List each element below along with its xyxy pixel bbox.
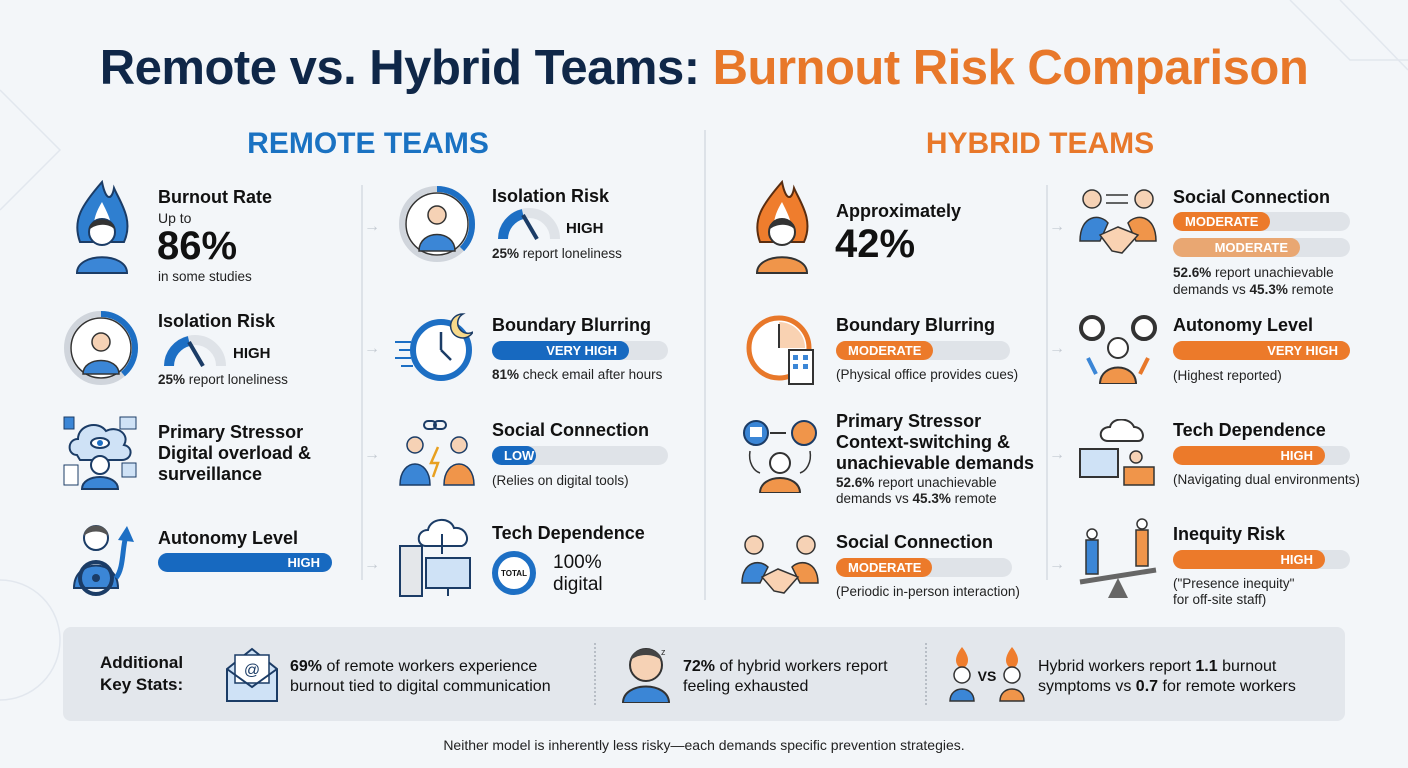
- text: →: [1049, 340, 1065, 357]
- panel: remote isolation risk: Isolation Risk: [158, 311, 275, 331]
- panel: remote isolation risk: HIGH: [233, 345, 270, 362]
- heading: hybrid teams: HYBRID TEAMS: [926, 127, 1154, 160]
- icon: handshake: [741, 535, 819, 594]
- panel: hybrid social connection 2: [1079, 187, 1350, 297]
- label: additional key stats: Additional: [100, 653, 183, 672]
- panel: hybrid autonomy level: (Highest reported): [1173, 368, 1282, 383]
- panel: hybrid autonomy level: VERY HIGH: [1267, 343, 1338, 358]
- panel: remote boundary blurring: [395, 313, 668, 382]
- arrows: [364, 218, 1065, 573]
- footer note: Neither model is inherently less risky—each demands specific prevention strategies.: [443, 737, 965, 753]
- panel: hybrid social connection 2: 52.6% report unachievable: [1173, 265, 1334, 280]
- stat: symptoms: Hybrid workers report 1.1 burnout: [1038, 658, 1276, 675]
- panel: remote boundary blurring: Boundary Blurring: [492, 315, 651, 335]
- icon: digital overload: [64, 416, 136, 490]
- panel: hybrid boundary blurring: Boundary Blurring: [836, 315, 995, 335]
- text: →: [364, 340, 380, 357]
- text: →: [1049, 556, 1065, 573]
- panel: hybrid social connection: Social Connection: [836, 532, 993, 552]
- icon: two people linked: [399, 420, 475, 486]
- panel: hybrid primary stressor: [743, 411, 1034, 506]
- panel: hybrid primary stressor: 52.6% report unachievable: [836, 475, 997, 490]
- panel: hybrid tech dependence: (Navigating dual environments): [1173, 472, 1360, 487]
- panel: hybrid inequity risk: for off-site staff): [1173, 592, 1266, 607]
- icon: envelope: [226, 648, 278, 702]
- text: →: [364, 446, 380, 463]
- panel: remote primary stressor: Digital overload &: [158, 443, 311, 463]
- panel: hybrid social connection 2: Social Connection: [1173, 187, 1330, 207]
- panel: remote isolation risk: [64, 311, 288, 387]
- panel: remote isolation risk 2: 25% report loneliness: [492, 246, 622, 261]
- panel: hybrid primary stressor: unachievable demands: [836, 453, 1034, 473]
- text: →: [1049, 218, 1065, 235]
- panel: additional key stats: [63, 627, 1345, 721]
- panel: hybrid inequity risk: Inequity Risk: [1173, 524, 1285, 544]
- panel: hybrid autonomy level: Autonomy Level: [1173, 315, 1313, 335]
- stat: remote digital: 69% of remote workers experience: [290, 658, 537, 675]
- icon: flame person: [76, 180, 128, 274]
- icon: handshake with arrows: [1079, 189, 1157, 254]
- icon: total ring: TOTAL: [501, 569, 527, 578]
- stat: hybrid exhausted: 72% of hybrid workers report: [683, 658, 888, 675]
- panel: remote boundary blurring: 81% check email after hours: [492, 367, 662, 382]
- panel: remote burnout rate: Burnout Rate: [158, 187, 272, 207]
- panel: remote tech dependence: [399, 518, 645, 597]
- panel: remote social connection: Social Connection: [492, 420, 649, 440]
- icon: computer and cloud: [1079, 419, 1155, 486]
- panel: hybrid social connection: [741, 532, 1020, 599]
- panel: remote autonomy level: HIGH: [288, 555, 320, 570]
- icon: vs flames: VS: [978, 668, 996, 684]
- icon: two steering wheels: [1079, 315, 1157, 384]
- panel: remote burnout rate: 86%: [157, 224, 237, 268]
- panel: remote primary stressor: [64, 416, 311, 490]
- panel: remote isolation risk 2: Isolation Risk: [492, 186, 609, 206]
- label: additional key stats: [100, 653, 183, 694]
- label: additional key stats: Key Stats:: [100, 675, 183, 694]
- panel: hybrid primary stressor: Context-switching &: [836, 432, 1010, 452]
- panel: remote burnout rate: [76, 180, 272, 284]
- panel: remote burnout rate: in some studies: [158, 269, 252, 284]
- text: →: [364, 556, 380, 573]
- panel: hybrid social connection 2: MODERATE: [1215, 240, 1288, 255]
- stat: hybrid exhausted: feeling exhausted: [683, 678, 808, 695]
- panel: hybrid burnout rate: [756, 180, 961, 274]
- stat: symptoms: symptoms vs 0.7 for remote workers: [1038, 678, 1296, 695]
- panel: hybrid boundary blurring: (Physical office provides cues): [836, 367, 1018, 382]
- stat: hybrid exhausted: [683, 657, 888, 697]
- icon: person in ring: [399, 186, 475, 262]
- panel: hybrid burnout rate: Approximately: [836, 201, 961, 221]
- panel: hybrid social connection: MODERATE: [848, 560, 921, 575]
- panel: hybrid inequity risk: ("Presence inequity": [1173, 576, 1294, 591]
- panel: hybrid tech dependence: [1079, 419, 1360, 487]
- text: →: [1049, 446, 1065, 463]
- panel: hybrid boundary blurring: [746, 315, 1018, 385]
- panel: remote autonomy level: Autonomy Level: [158, 528, 298, 548]
- panel: hybrid burnout rate: 42%: [835, 222, 915, 266]
- panel: hybrid social connection 2: demands vs 45.3% remote: [1173, 282, 1334, 297]
- icon: exhausted person: z: [661, 647, 666, 657]
- panel: remote social connection: [399, 420, 668, 488]
- panel: remote social connection: (Relies on digital tools): [492, 473, 629, 488]
- panel: hybrid tech dependence: HIGH: [1280, 448, 1313, 463]
- panel: remote social connection: LOW: [504, 448, 534, 463]
- panel: hybrid inequity risk: HIGH: [1280, 552, 1313, 567]
- gauge: [164, 335, 226, 367]
- icon: computer and cloud: [399, 518, 471, 597]
- text: →: [364, 218, 380, 235]
- stat: remote digital: [290, 658, 551, 695]
- panel: remote primary stressor: surveillance: [158, 464, 262, 484]
- icon: seesaw: [1080, 518, 1156, 598]
- panel: hybrid social connection 2: MODERATE: [1185, 214, 1258, 229]
- panel: hybrid autonomy level: [1079, 315, 1350, 384]
- panel: remote autonomy level: [73, 525, 332, 596]
- icon: flame person orange: [756, 180, 808, 274]
- panel: remote tech dependence: digital: [553, 574, 603, 595]
- panel: remote isolation risk 2: [399, 186, 622, 262]
- panel: remote isolation risk 2: HIGH: [566, 220, 604, 237]
- panel: remote primary stressor: Primary Stressor: [158, 422, 303, 442]
- icon: envelope: @: [244, 662, 260, 679]
- panel: hybrid primary stressor: Primary Stressor: [836, 411, 981, 431]
- panel: remote tech dependence: 100%: [553, 552, 602, 573]
- heading: remote teams: REMOTE TEAMS: [247, 127, 489, 160]
- panel: hybrid social connection: (Periodic in-person interaction): [836, 584, 1020, 599]
- icon: driver: [73, 525, 134, 596]
- icon: clock with moon: [395, 313, 473, 381]
- panel: remote burnout rate: Up to: [158, 210, 191, 226]
- icon: vs flames: [948, 643, 1028, 703]
- icon: total ring: [492, 551, 536, 595]
- panel: remote boundary blurring: VERY HIGH: [546, 343, 617, 358]
- panel: hybrid inequity risk: [1080, 518, 1350, 607]
- icon: person in ring: [64, 311, 138, 385]
- icon: clock with building: [746, 316, 814, 385]
- panel: hybrid boundary blurring: MODERATE: [848, 343, 921, 358]
- stat: symptoms: [1038, 657, 1296, 697]
- icon: context switching: [743, 420, 817, 493]
- panel: remote tech dependence: Tech Dependence: [492, 523, 645, 543]
- icon: exhausted person: [619, 643, 673, 703]
- gauge: [498, 208, 560, 240]
- panel: remote isolation risk: 25% report loneliness: [158, 372, 288, 387]
- panel: hybrid tech dependence: Tech Dependence: [1173, 420, 1326, 440]
- stat: remote digital: burnout tied to digital communication: [290, 678, 551, 695]
- panel: hybrid primary stressor: demands vs 45.3% remote: [836, 491, 997, 506]
- title: Remote vs. Hybrid Teams: Burnout Risk Comparison: [100, 41, 1308, 95]
